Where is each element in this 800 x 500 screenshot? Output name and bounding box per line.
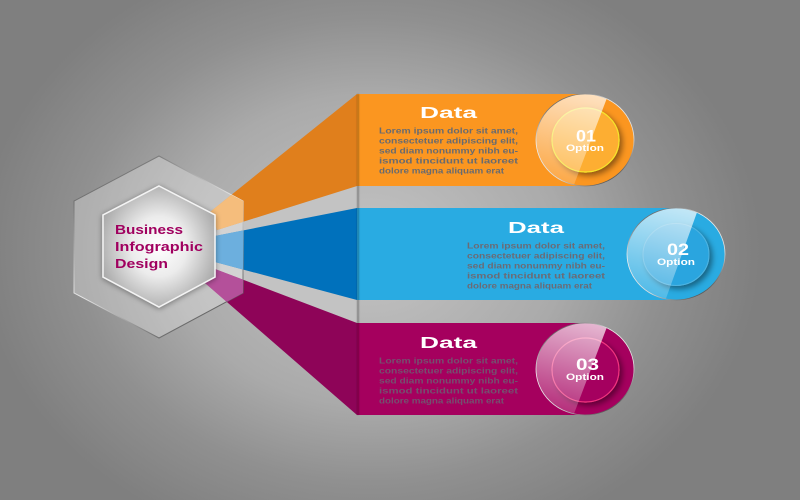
glass button 02: 02 [667, 241, 689, 259]
wedge: magenta [205, 269, 357, 415]
body text 02 [467, 242, 605, 290]
glass button 01: Option [566, 143, 604, 154]
body text 03: sed diam nonummy nibh eu- [379, 376, 518, 386]
title [115, 222, 203, 271]
title: Infographic [115, 239, 203, 254]
glass button 03: 03 [576, 356, 599, 374]
body text 02: ismod tincidunt ut laoreet [467, 272, 605, 280]
body text 01: ismod tincidunt ut laoreet [379, 156, 518, 166]
body text 03: dolore magna aliquam erat [379, 396, 504, 406]
vertical fold line [357, 94, 359, 415]
panel: option 03 [357, 319, 634, 419]
wedge: blue [215, 208, 357, 300]
panel: option 01 [357, 90, 634, 190]
body text 03: ismod tincidunt ut laoreet [379, 386, 518, 396]
heading 02: Data [508, 220, 565, 237]
heading 01: Data [420, 105, 478, 122]
panel: option 02 [357, 204, 725, 304]
body text 01: dolore magna aliquam erat [379, 166, 504, 176]
central hexagon with title [103, 186, 215, 307]
title: Design [115, 256, 168, 271]
glass outer hexagon [74, 156, 243, 338]
glass button 02 [626, 208, 726, 300]
body text 01: consectetuer adipiscing elit, [379, 136, 518, 146]
glass tips of wedges [205, 194, 243, 302]
body text 02: sed diam nonummy nibh eu- [467, 262, 605, 270]
glass button 03 [536, 322, 634, 416]
title: Business [115, 222, 183, 237]
body text 03 [379, 356, 518, 406]
blue band [357, 208, 725, 300]
glass button 03: Option [566, 372, 604, 383]
body text 01 [379, 126, 518, 176]
orange band [357, 94, 634, 186]
glass button 02: Option [657, 257, 695, 268]
body text 02: dolore magna aliquam erat [467, 282, 592, 290]
body text 02: Lorem ipsum dolor sit amet, [467, 242, 605, 250]
glass button 01 [536, 94, 634, 186]
glass button 01: 01 [576, 128, 596, 146]
body text 03: Lorem ipsum dolor sit amet, [379, 356, 518, 366]
body text 01: Lorem ipsum dolor sit amet, [379, 126, 518, 136]
wedge: orange [210, 94, 357, 230]
body text 02: consectetuer adipiscing elit, [467, 252, 605, 260]
body text 03: consectetuer adipiscing elit, [379, 366, 518, 376]
magenta band [357, 323, 634, 415]
body text 01: sed diam nonummy nibh eu- [379, 146, 518, 156]
heading 03: Data [420, 335, 478, 352]
light connector strips between wedges [215, 186, 357, 323]
